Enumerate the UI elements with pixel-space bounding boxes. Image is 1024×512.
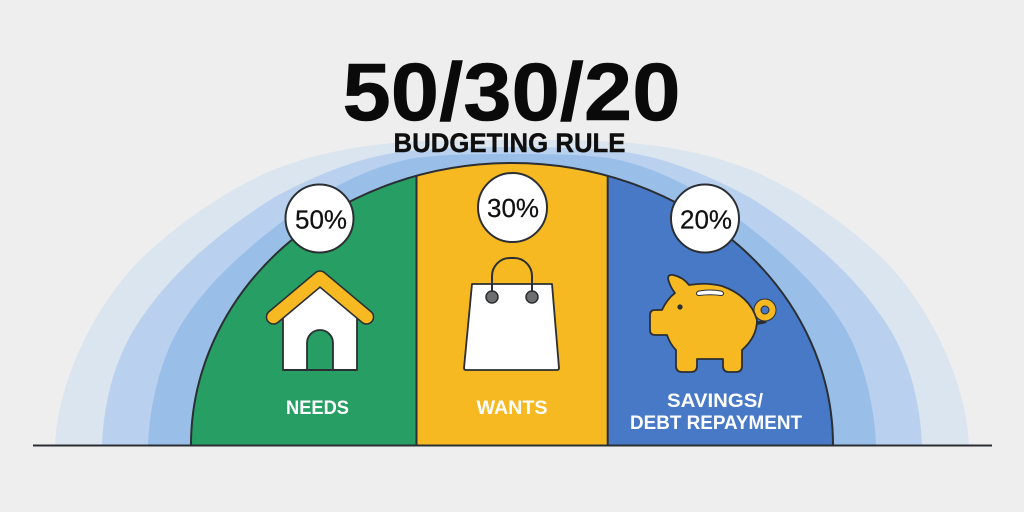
label: savings / debt repayment: DEBT REPAYMENT [630,413,802,434]
label: wants: WANTS [476,398,548,419]
outer glow arcs [55,140,969,445]
panel: savings background [608,160,834,446]
badge: 30%: 30% [487,193,539,223]
subtitle: BUDGETING RULE [394,128,626,158]
label: savings / debt repayment: SAVINGS/ [667,391,764,412]
badge: 30% [478,173,547,242]
icon: piggy bank [650,275,772,372]
icon: shopping bag [464,258,559,370]
label: savings / debt repayment [630,391,802,434]
icon: house [274,278,366,370]
panel: needs background [191,160,417,446]
label: needs: NEEDS [286,398,349,419]
baseline [33,444,992,446]
badge: 50% [286,184,354,252]
badge: 20% [671,184,739,252]
dome outline and dividers [191,163,833,445]
title: 50/30/20 [342,47,680,138]
panel: wants background [417,160,608,446]
badge: 50%: 50% [295,204,347,234]
badge: 20%: 20% [680,204,732,234]
